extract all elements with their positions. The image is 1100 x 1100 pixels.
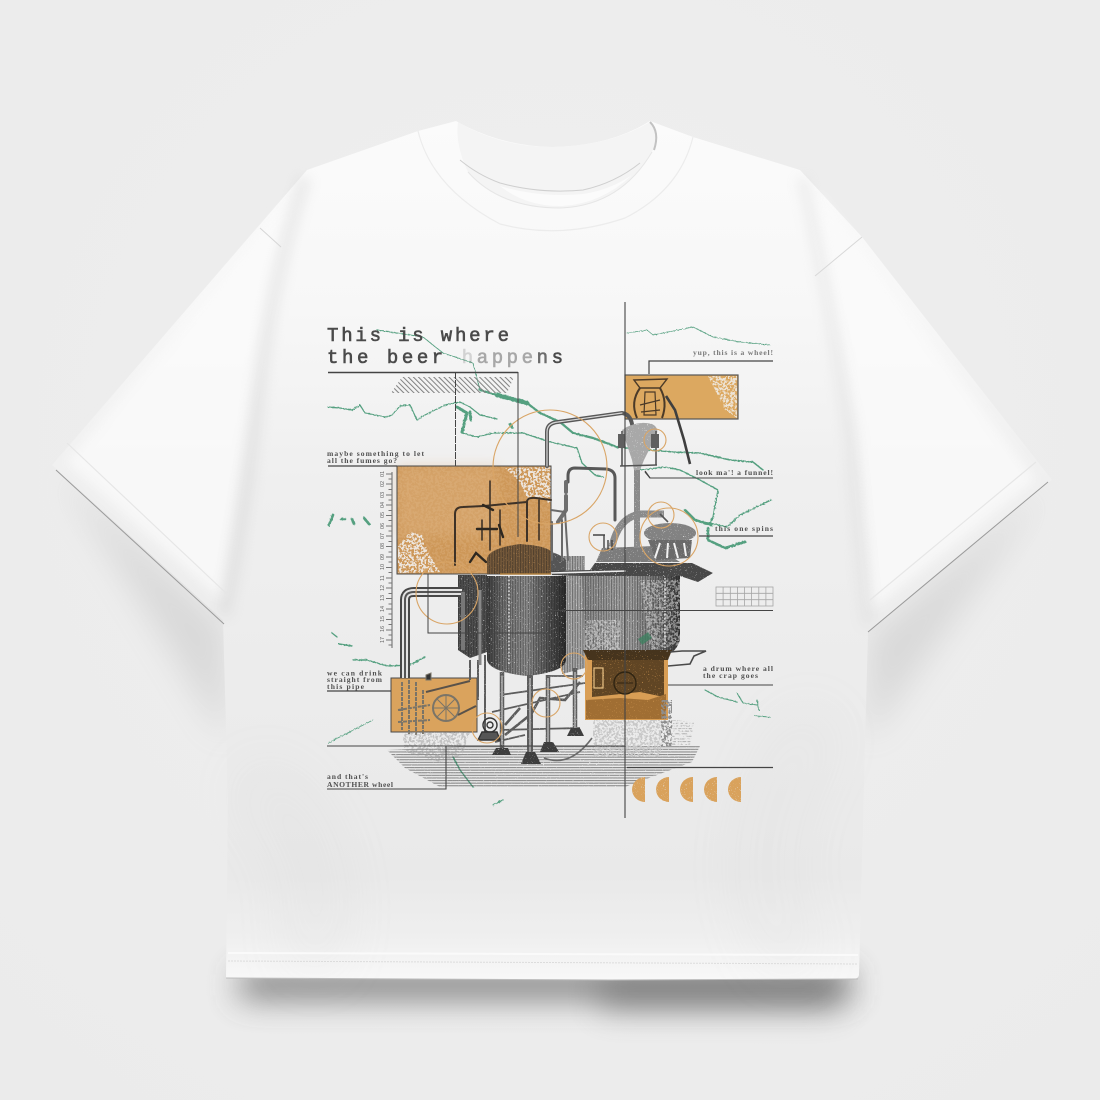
label: wheel: yup, this is a wheel! xyxy=(693,348,773,357)
tank legs xyxy=(470,655,585,755)
pipes below big circle xyxy=(551,510,568,560)
label: another wheel: and that's xyxy=(327,772,368,781)
green line: lower right xyxy=(705,690,770,717)
ruler: 15 xyxy=(380,616,386,622)
sleeve and hem stitching xyxy=(56,228,1048,980)
green line: river thick part xyxy=(497,395,527,403)
orange block: lower left xyxy=(391,678,477,732)
platform highlight xyxy=(551,571,626,573)
label: pipe: we can drink xyxy=(327,668,383,678)
pipe: verticals xyxy=(482,481,539,550)
furnace base xyxy=(593,700,694,757)
label: another wheel: ANOTHER wheel xyxy=(327,780,393,789)
orange block: top right xyxy=(625,375,738,419)
furnace side pipes xyxy=(668,651,706,666)
green blob: right xyxy=(685,510,745,548)
ruler: 03 xyxy=(380,492,386,498)
green line: diagonal xyxy=(328,720,373,743)
green map lines xyxy=(328,327,771,805)
distress under lower left block xyxy=(402,732,470,762)
ruler xyxy=(380,471,392,648)
leg highlights xyxy=(502,672,575,752)
base curved pipe xyxy=(544,738,592,760)
kettle rivet line xyxy=(664,578,666,648)
label: pipe: straight from xyxy=(327,675,383,684)
label: fumes line two: all the fumes go? xyxy=(327,456,397,465)
kettle platform xyxy=(552,546,713,582)
collar xyxy=(418,122,693,231)
ruler: 17 xyxy=(380,637,386,643)
left small tank xyxy=(458,575,487,658)
label: drum line two: the crap goes xyxy=(703,671,758,680)
ruler: 05 xyxy=(380,512,386,518)
back tank xyxy=(562,556,585,674)
measuring grid xyxy=(716,587,773,606)
green line: left ridge xyxy=(328,402,497,420)
ruler: 10 xyxy=(380,564,386,570)
green line: lower left xyxy=(332,633,425,666)
layout rules xyxy=(327,302,773,818)
pipe: inner arch xyxy=(568,468,615,520)
main tank xyxy=(487,544,566,676)
green line: top right xyxy=(627,327,770,345)
pump wheel xyxy=(478,718,500,740)
green line: bottom xyxy=(453,757,503,805)
label: pipe: this pipe xyxy=(327,682,365,691)
green blobs: fork xyxy=(457,407,512,432)
tank feet xyxy=(492,728,584,764)
ruler: 07 xyxy=(380,533,386,539)
label: another wheel xyxy=(327,772,393,789)
machine floor hatching xyxy=(387,746,700,787)
green line: branch xyxy=(462,433,603,477)
green line: river middle xyxy=(480,390,617,447)
tank rivet line xyxy=(508,576,510,665)
furnace xyxy=(583,650,672,720)
orange blocks xyxy=(391,375,738,732)
label: fumes: maybe something to let xyxy=(327,449,424,458)
brewing machine xyxy=(398,379,713,764)
curved arm xyxy=(612,514,668,547)
sleeve folds xyxy=(224,178,868,970)
orange block: large xyxy=(397,466,551,574)
ruler: 12 xyxy=(380,585,386,591)
ruler: 06 xyxy=(380,523,386,529)
spinning drum xyxy=(644,523,696,560)
ruler: 08 xyxy=(380,543,386,549)
ruler: 16 xyxy=(380,626,386,632)
small stand under ring xyxy=(593,535,612,550)
left pipe assembly xyxy=(405,590,480,678)
ruler: 01 xyxy=(380,471,386,477)
label: spins: this one spins xyxy=(715,524,773,533)
t-shirt xyxy=(52,121,1052,980)
pipe: left arch xyxy=(455,506,484,565)
ruler: 11 xyxy=(380,575,386,581)
green marks: left cluster xyxy=(329,515,369,525)
shirt shadow xyxy=(60,472,1044,1010)
title: This is where xyxy=(327,325,509,347)
sleeve brightening xyxy=(66,190,1036,610)
machinery in lower left block xyxy=(398,673,476,735)
label: drum: a drum where all xyxy=(703,664,773,673)
funnel xyxy=(618,423,659,548)
ruler: 04 xyxy=(380,502,386,508)
ruler: 09 xyxy=(380,554,386,560)
pipe coupling xyxy=(558,482,566,522)
kettle wear xyxy=(585,580,680,650)
green stain on kettle xyxy=(640,635,650,642)
green line: river right xyxy=(617,447,763,470)
title: the beer happens xyxy=(327,347,563,369)
upper pipes xyxy=(455,413,632,565)
fittings on left block xyxy=(470,505,503,562)
label: pipe xyxy=(327,668,383,691)
wheel in top right block xyxy=(634,379,690,464)
green line: right river xyxy=(640,467,771,527)
ruler: 13 xyxy=(380,595,386,601)
ruler: 14 xyxy=(380,606,386,612)
pipe: big arch xyxy=(547,413,632,466)
green line: thin head of river xyxy=(377,330,480,390)
hatched bar xyxy=(391,377,514,393)
label: funnel: look ma'! a funnel! xyxy=(696,468,773,477)
title xyxy=(327,325,563,369)
orange rings xyxy=(416,410,698,743)
kettle tank xyxy=(582,574,680,654)
shirt body xyxy=(52,121,1052,980)
ruler: 02 xyxy=(380,481,386,487)
half moons xyxy=(632,777,741,802)
